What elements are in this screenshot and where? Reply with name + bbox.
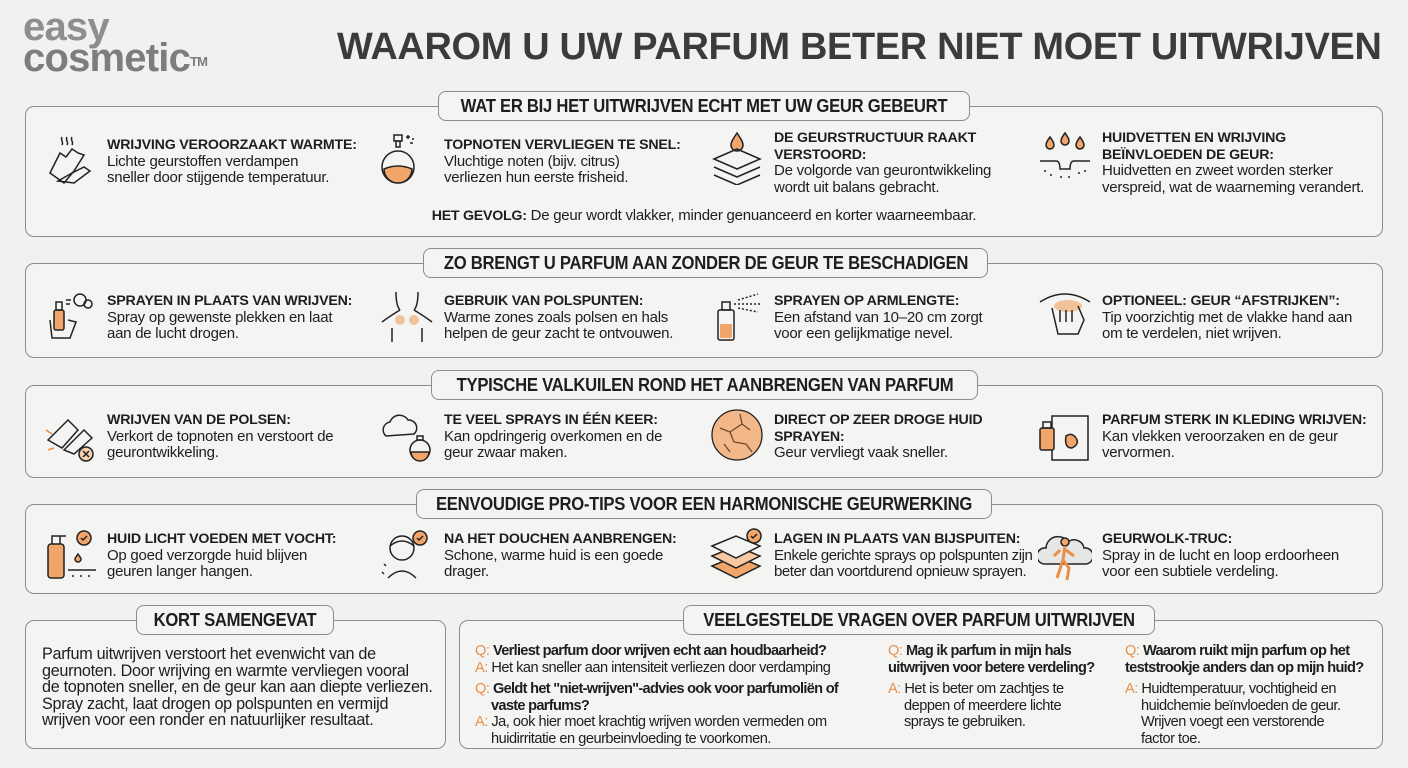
text: douchen: drager. — [444, 563, 489, 580]
faq column 3 — [1125, 643, 1364, 746]
text: te veel: geur zwaar maken. — [444, 444, 567, 461]
faq column 3: Q: Waarom ruikt mijn parfum op het — [1125, 643, 1349, 659]
icon: rubbing hands — [49, 136, 92, 184]
logo: cosmeticTM — [23, 36, 207, 80]
text: geurwolk — [1102, 531, 1339, 580]
faq column 1 — [475, 643, 839, 746]
title: WAAROM U UW PARFUM BETER NIET MOET UITWRIJVEN — [337, 26, 1382, 68]
icon: clothing — [1039, 415, 1089, 461]
icon: perfume bottle — [381, 134, 415, 184]
icon: cloud sprays — [382, 414, 431, 462]
heading: summary — [136, 605, 334, 635]
faq column 1: Q: Geldt het "niet-wrijven"-advies ook voor parfumoliën of — [475, 681, 838, 697]
icon: dry skin — [711, 409, 763, 461]
text: summary: Parfum uitwrijven verstoort het evenwicht van de — [42, 645, 376, 663]
faq column 3: factor toe. — [1141, 730, 1200, 746]
icon: neck — [382, 292, 432, 342]
faq column 2: uitwrijven voor betere verdeling? — [888, 660, 1094, 676]
heading: pitfalls: TYPISCHE VALKUILEN ROND HET AANBRENGEN VAN PARFUM — [456, 374, 953, 395]
heading: how to apply — [423, 248, 988, 278]
logo: easy — [23, 5, 109, 49]
panel: how to apply — [25, 263, 1383, 358]
text: lagen: beter dan voortdurend opnieuw sprayen. — [774, 563, 1026, 580]
text: armlengte: voor een gelijkmatige nevel. — [774, 325, 953, 342]
text: douchen: Schone, warme huid is een goede — [444, 546, 663, 564]
text: vocht: HUID LICHT VOEDEN MET VOCHT: — [107, 531, 336, 547]
text: kleding: vervormen. — [1102, 444, 1175, 461]
text: kleding — [1102, 412, 1366, 461]
text: te veel: Kan opdringerig overkomen en de — [444, 428, 662, 444]
text: armlengte — [774, 293, 983, 342]
text: topnoten: TOPNOTEN VERVLIEGEN TE SNEL: — [444, 137, 681, 153]
text: droge huid: SPRAYEN: — [774, 428, 844, 444]
text: warmte: WRIJVING VEROORZAAKT WARMTE: — [107, 137, 357, 153]
text: summary: wrijven voor een ronder en natuurlijker resultaat. — [42, 711, 373, 729]
text: afstrijken: om te verdelen, niet wrijven. — [1102, 325, 1282, 342]
text: result: HET GEVOLG: De geur wordt vlakker, minder genuanceerd en korter waarneembaar. — [432, 207, 976, 224]
text: warmte: sneller door stijgende temperatuur. — [107, 169, 329, 186]
text: geurwolk: GEURWOLK-TRUC: — [1102, 531, 1232, 547]
heading: summary: KORT SAMENGEVAT — [154, 609, 316, 630]
icon: rubbing wrists — [46, 419, 94, 462]
logo — [23, 5, 208, 80]
icon: layers drop — [712, 132, 762, 185]
text: summary: de topnoten sneller, en de geur kan aan diepte verliezen. — [42, 678, 433, 696]
icon: arm length spray — [717, 293, 760, 341]
text: sprayen: SPRAYEN IN PLAATS VAN WRIJVEN: — [107, 293, 352, 309]
text: armlengte: SPRAYEN OP ARMLENGTE: — [774, 293, 959, 309]
text: afstrijken — [1102, 293, 1352, 342]
text: huidvetten: Huidvetten en zweet worden sterker — [1102, 162, 1333, 179]
text: warmte — [107, 137, 357, 186]
text: structuur: De volgorde van geurontwikkeling — [774, 162, 991, 179]
text: huidvetten: HUIDVETTEN EN WRIJVING — [1102, 130, 1286, 146]
faq column 3: huidchemie beïnvloeden de geur. — [1141, 698, 1341, 714]
text: warmte: Lichte geurstoffen verdampen — [107, 152, 298, 170]
text: polsen: geurontwikkeling. — [107, 444, 219, 461]
panel: pitfalls — [25, 385, 1383, 478]
text: topnoten: verliezen hun eerste frisheid. — [444, 169, 628, 186]
text: kleding: Kan vlekken veroorzaken en de geur — [1102, 428, 1338, 444]
text: douchen: NA HET DOUCHEN AANBRENGEN: — [444, 531, 677, 547]
faq column 2: A: Het is beter om zachtjes te — [888, 681, 1064, 697]
text: summary: Spray zacht, laat drogen op polspunten en vermijd — [42, 694, 388, 712]
icon: shower face — [382, 530, 428, 578]
text: geurwolk: voor een subtiele verdeling. — [1102, 563, 1278, 580]
text: topnoten — [444, 137, 681, 186]
text: vocht — [107, 531, 336, 580]
faq column 2: deppen of meerdere lichte — [904, 698, 1061, 714]
heading: what happens: WAT ER BIJ HET UITWRIJVEN ECHT MET UW GEUR GEBEURT — [461, 95, 947, 116]
icon: hand over skin — [1040, 293, 1090, 335]
heading: faq: VEELGESTELDE VRAGEN OVER PARFUM UITWRIJVEN — [703, 609, 1135, 630]
text: polspunten — [444, 293, 673, 342]
icon: lotion — [47, 530, 96, 579]
panel: pro tips — [25, 504, 1383, 594]
text: lagen: Enkele gerichte sprays op polspunten zijn — [774, 546, 1032, 564]
faq column 1: vaste parfums? — [491, 698, 589, 714]
faq column 2: sprays te gebruiken. — [904, 714, 1025, 730]
faq column 1: A: Ja, ook hier moet krachtig wrijven worden vermeden om — [475, 714, 827, 730]
text: polspunten: Warme zones zoals polsen en hals — [444, 308, 668, 326]
text: topnoten: Vluchtige noten (bijv. citrus) — [444, 152, 620, 170]
text: structuur: VERSTOORD: — [774, 146, 866, 162]
text: sprayen: Spray op gewenste plekken en laat — [107, 308, 332, 326]
text: huidvetten: verspreid, wat de waarneming verandert. — [1102, 178, 1364, 196]
text: douchen — [444, 531, 677, 580]
panel: faq — [459, 620, 1383, 749]
text: summary — [42, 645, 433, 729]
text: sprayen: aan de lucht drogen. — [107, 325, 239, 342]
text: droge huid: DIRECT OP ZEER DROGE HUID — [774, 412, 982, 428]
text: polsen — [107, 412, 333, 461]
faq column 3: A: Huidtemperatuur, vochtigheid en — [1125, 681, 1336, 697]
text: structuur: DE GEURSTRUCTUUR RAAKT — [774, 130, 976, 146]
heading: pro tips — [416, 489, 992, 519]
text: afstrijken: Tip voorzichtig met de vlakke hand aan — [1102, 308, 1352, 326]
text: structuur: wordt uit balans gebracht. — [774, 178, 939, 196]
text: geurwolk: Spray in de lucht en loop erdoorheen — [1102, 546, 1339, 564]
heading: what happens — [438, 91, 970, 121]
text: huidvetten — [1102, 130, 1364, 196]
faq column 1: huidirritatie en geurbeinvloeding te voorkomen. — [491, 730, 771, 746]
faq column 1: Q: Verliest parfum door wrijven echt aan houdbaarheid? — [475, 643, 826, 659]
text: summary: geurnoten. Door wrijving en warmte vervliegen vooral — [42, 662, 409, 680]
faq column 3: teststrookje anders dan op mijn huid? — [1125, 660, 1363, 676]
faq column 2 — [888, 643, 1094, 730]
text: structuur — [774, 130, 991, 196]
text: lagen: LAGEN IN PLAATS VAN BIJSPUITEN: — [774, 531, 1020, 547]
text: polsen: Verkort de topnoten en verstoort de — [107, 428, 333, 444]
text: lagen — [774, 531, 1032, 580]
text: te veel — [444, 412, 662, 461]
icon: spray hand — [49, 293, 93, 339]
text: afstrijken: OPTIONEEL: GEUR “AFSTRIJKEN”: — [1102, 293, 1340, 309]
text: armlengte: Een afstand van 10–20 cm zorgt — [774, 308, 982, 326]
faq column 3: Wrijven voegt een verstorende — [1141, 714, 1324, 730]
text: sprayen — [107, 293, 352, 342]
heading: how to apply: ZO BRENGT U PARFUM AAN ZONDER DE GEUR TE BESCHADIGEN — [443, 252, 968, 273]
text: polspunten: helpen de geur zacht te ontvouwen. — [444, 325, 673, 342]
faq column 2: Q: Mag ik parfum in mijn hals — [888, 643, 1071, 659]
heading: pitfalls — [431, 370, 978, 400]
text: te veel: TE VEEL SPRAYS IN ÉÉN KEER: — [444, 412, 658, 428]
faq column 1: A: Het kan sneller aan intensiteit verliezen door verdamping — [475, 660, 830, 676]
text: polspunten: GEBRUIK VAN POLSPUNTEN: — [444, 293, 643, 309]
text: droge huid — [774, 412, 982, 461]
text: huidvetten: BEÏNVLOEDEN DE GEUR: — [1102, 146, 1274, 162]
heading: pro tips: EENVOUDIGE PRO-TIPS VOOR EEN HARMONISCHE GEURWERKING — [436, 493, 972, 514]
icon: walking through cloud — [1038, 536, 1092, 580]
text: polsen: WRIJVEN VAN DE POLSEN: — [107, 412, 291, 428]
icon: layers — [710, 528, 762, 579]
heading: faq — [683, 605, 1155, 635]
panel: summary — [25, 620, 446, 749]
text: vocht: Op goed verzorgde huid blijven — [107, 546, 307, 564]
text: vocht: geuren langer hangen. — [107, 563, 253, 580]
panel: what happens — [25, 106, 1383, 237]
text: kleding: PARFUM STERK IN KLEDING WRIJVEN: — [1102, 412, 1366, 428]
icon: skin drops — [1040, 132, 1090, 178]
text: droge huid: Geur vervliegt vaak sneller. — [774, 444, 948, 461]
